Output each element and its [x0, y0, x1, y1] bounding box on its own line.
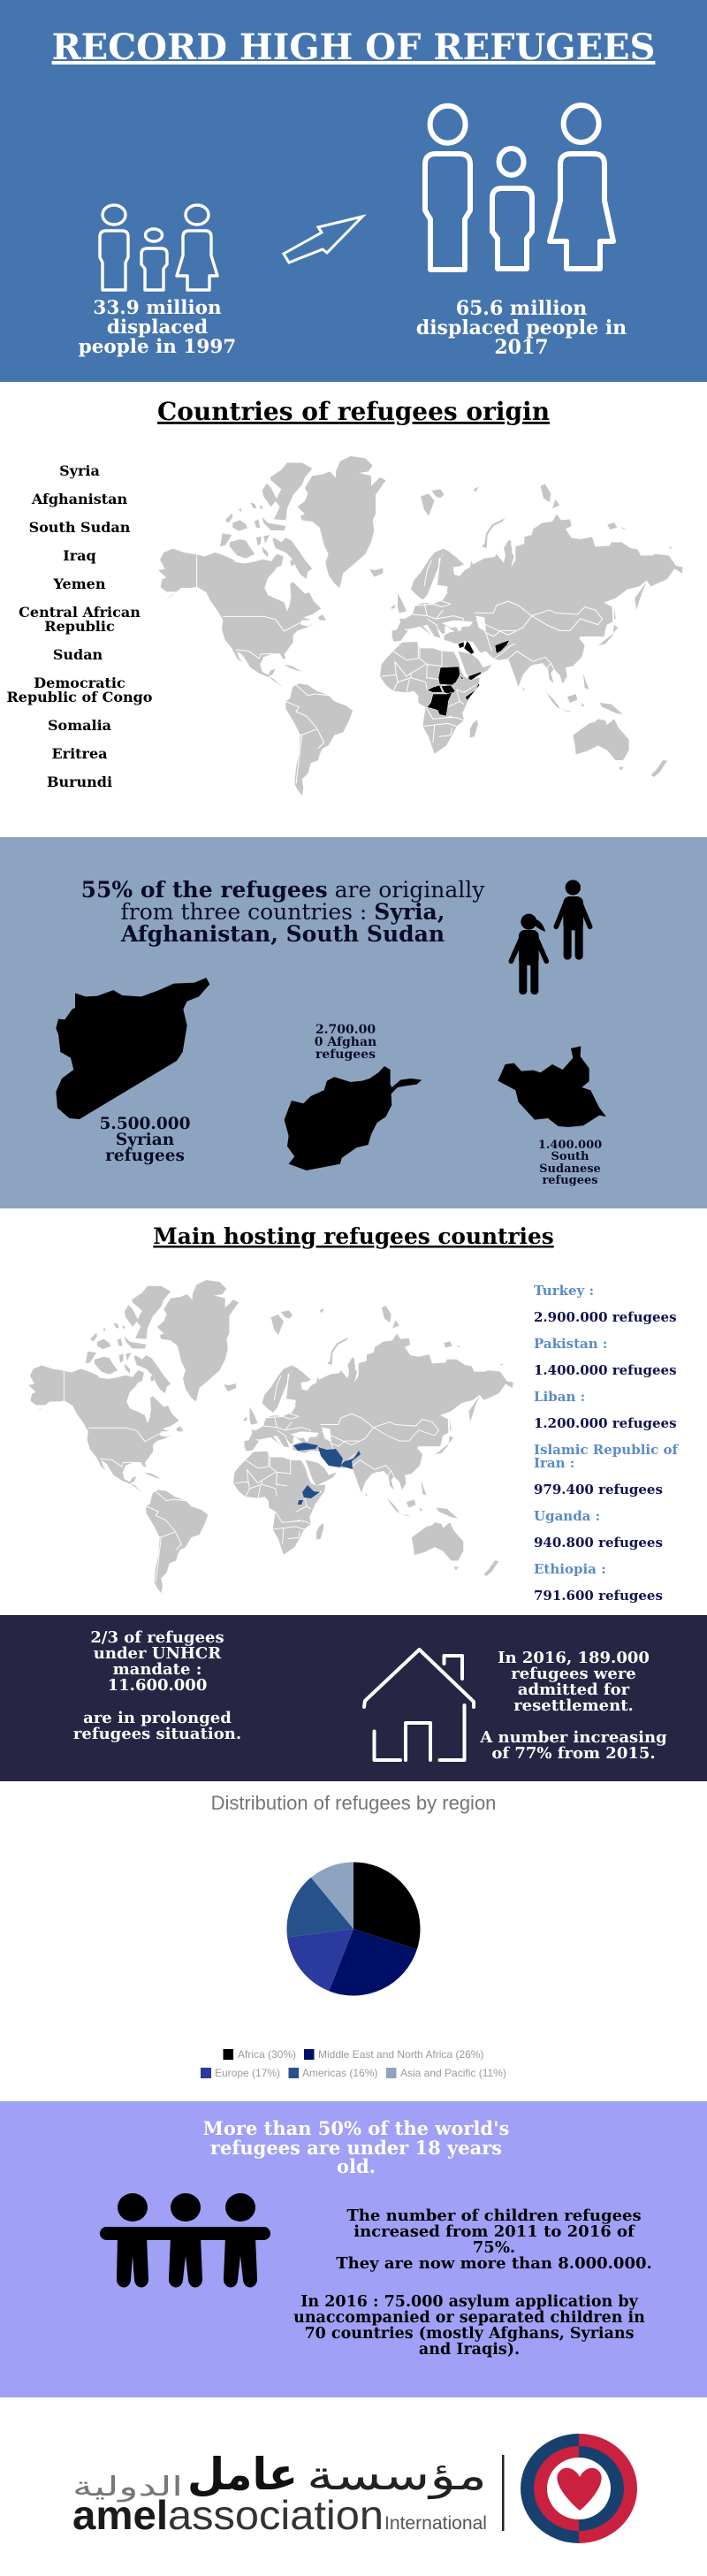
- text: UNHCR mandate: 11.600.000: [108, 1676, 207, 1695]
- icon: adult and child silhouettes: [511, 880, 590, 995]
- text: Afghan refugees: refugees: [315, 1048, 376, 1062]
- text: 55 percent statement: 55% of the refugees are originally: [81, 877, 485, 903]
- icon: small family 1997: [100, 205, 217, 290]
- panel: UNHCR and resettlement: [0, 1615, 707, 1781]
- title: RECORD HIGH OF REFUGEES: [52, 27, 655, 68]
- chart legend: Africa (30%): [238, 2048, 296, 2061]
- text: South Sudanese refugees: South: [551, 1150, 589, 1163]
- text: Syrian refugees: [99, 1115, 191, 1165]
- logo emblem: [521, 2434, 637, 2543]
- text: resettlement: refugees were: [511, 1665, 636, 1683]
- text: 1997 figure: displaced: [107, 316, 208, 339]
- heading: hosting countries: Main hosting refugees countries: [153, 1223, 554, 1249]
- panel: main hosting countries: [0, 1208, 707, 1615]
- heading: under 18: More than 50% of the world's: [203, 2117, 509, 2139]
- map: origin world map: [158, 456, 683, 796]
- text: Afghan refugees: 2.700.00: [315, 1023, 376, 1037]
- text: Afghan refugees: [315, 1023, 376, 1062]
- heading: under 18: [203, 2117, 509, 2177]
- panel: children refugees: [0, 2101, 707, 2397]
- text: resettlement: In 2016, 189.000: [498, 1649, 650, 1667]
- list: hosting countries figures: Uganda :: [534, 1508, 600, 1524]
- map: hosting world map: [28, 1280, 513, 1593]
- list: origin countries: Iraq: [63, 547, 96, 564]
- list: hosting countries figures: 979.400 refugees: [534, 1482, 663, 1498]
- chart legend: [201, 2048, 506, 2079]
- list: hosting countries figures: 791.600 refugees: [534, 1588, 663, 1604]
- list: hosting countries figures: Turkey :: [534, 1283, 594, 1299]
- text: South Sudanese refugees: Sudanese: [539, 1162, 601, 1176]
- list: origin countries: South Sudan: [29, 519, 131, 536]
- list: origin countries: Afghanistan: [31, 491, 128, 507]
- list: origin countries: Eritrea: [51, 745, 108, 762]
- logo: Amel Association International: [72, 2434, 637, 2543]
- text: 2017 figure: [416, 297, 627, 359]
- logo wordmark: association: [168, 2492, 384, 2538]
- list: hosting countries figures: 1.400.000 refugees: [534, 1362, 677, 1378]
- heading: origin countries: Countries of refugees origin: [157, 397, 550, 426]
- list: hosting countries figures: 2.900.000 refugees: [534, 1309, 677, 1325]
- text: 1997 figure: people in 1997: [79, 336, 236, 358]
- text: Syrian refugees: refugees: [105, 1147, 185, 1165]
- heading: under 18: refugees are under 18 years: [210, 2137, 502, 2159]
- logo wordmark: amel: [72, 2492, 168, 2538]
- list: hosting countries figures: [534, 1283, 679, 1604]
- list: hosting countries figures: Liban :: [534, 1389, 585, 1405]
- text: UNHCR mandate: under UNHCR: [94, 1644, 222, 1663]
- icon: house outline: [364, 1650, 474, 1760]
- text: 1997 figure: [79, 297, 236, 358]
- logo wordmark: International: [384, 2513, 487, 2534]
- panel: distribution pie chart: [0, 1781, 707, 2101]
- text: resettlement: of 77% from 2015.: [491, 1744, 656, 1763]
- text: resettlement: [479, 1649, 667, 1763]
- chart title: Distribution of refugees by region: [211, 1792, 496, 1814]
- list: origin countries: Democratic: [34, 674, 125, 691]
- text: UNHCR mandate: mandate :: [113, 1660, 201, 1679]
- text: resettlement: resettlement.: [513, 1696, 634, 1715]
- text: asylum applications: unaccompanied or separated children in: [293, 2309, 645, 2327]
- list: hosting countries figures: Islamic Republic of: [534, 1442, 679, 1458]
- text: number of children: increased from 2011 to 2016 of: [354, 2222, 635, 2241]
- text: asylum applications: [293, 2293, 645, 2359]
- text: South Sudanese refugees: [538, 1139, 602, 1187]
- list: hosting countries figures: Pakistan :: [534, 1336, 607, 1352]
- text: 55 percent statement: [81, 877, 485, 947]
- logo wordmark: مؤسسة: [307, 2451, 487, 2500]
- text: Afghan refugees: 0 Afghan: [315, 1035, 376, 1049]
- icon: large family 2017: [425, 105, 613, 270]
- logo wordmark: عامل: [187, 2449, 298, 2500]
- list: origin countries: Burundi: [47, 774, 112, 790]
- text: resettlement: admitted for: [518, 1680, 630, 1699]
- list: origin countries: Somalia: [48, 717, 111, 734]
- text: Syrian refugees: Syrian: [116, 1131, 175, 1149]
- text: asylum applications: and Iraqis).: [419, 2341, 520, 2359]
- text: UNHCR mandate: 2/3 of refugees: [90, 1628, 224, 1647]
- chart legend: Middle East and North Africa (26%): [318, 2048, 483, 2061]
- logo wordmark: الدولية: [72, 2472, 183, 2503]
- list: origin countries: [7, 462, 153, 790]
- text: asylum applications: 70 countries (mostly Afghans, Syrians: [304, 2325, 635, 2343]
- text: Syrian refugees: 5.500.000: [99, 1115, 191, 1133]
- text: UNHCR mandate: [73, 1628, 241, 1743]
- text: 2017 figure: displaced people in: [416, 316, 627, 339]
- text: 55 percent statement: Afghanistan, South Sudan: [120, 921, 445, 947]
- icon: three children holding arms: [100, 2193, 270, 2288]
- text: number of children: The number of children refugees: [346, 2206, 642, 2225]
- arrow: increase: [284, 217, 362, 263]
- list: origin countries: Syria: [59, 462, 100, 479]
- chart legend: Europe (17%): [215, 2067, 280, 2079]
- list: origin countries: Republic of Congo: [7, 689, 153, 705]
- text: 1997 figure: 33.9 million: [93, 297, 222, 319]
- text: number of children: 75%.: [473, 2238, 515, 2257]
- list: hosting countries figures: Iran :: [534, 1455, 574, 1471]
- list: hosting countries figures: 940.800 refugees: [534, 1535, 663, 1551]
- text: asylum applications: In 2016 : 75.000 asylum application by: [300, 2293, 639, 2311]
- chart legend: Americas (16%): [302, 2067, 377, 2079]
- chart legend: Asia and Pacific (11%): [400, 2067, 506, 2079]
- text: 55 percent statement: from three countries : Syria,: [121, 899, 445, 925]
- text: South Sudanese refugees: 1.400.000: [538, 1139, 602, 1152]
- list: hosting countries figures: Ethiopia :: [534, 1561, 606, 1577]
- text: South Sudanese refugees: refugees: [542, 1174, 598, 1187]
- text: number of children: They are now more than 8.000.000.: [336, 2254, 652, 2273]
- text: UNHCR mandate: refugees situation.: [73, 1725, 241, 1743]
- list: hosting countries figures: 1.200.000 refugees: [534, 1415, 677, 1431]
- text: number of children: [336, 2206, 652, 2273]
- map shape: Syria: [56, 978, 209, 1119]
- text: resettlement: A number increasing: [479, 1728, 667, 1747]
- panel: header record high: [0, 0, 707, 382]
- map shape: South Sudan: [498, 1046, 606, 1127]
- panel: countries of refugees origin: [0, 382, 707, 837]
- heading: under 18: old.: [337, 2155, 376, 2177]
- text: UNHCR mandate: are in prolonged: [83, 1709, 232, 1727]
- pie chart: [286, 1862, 420, 1995]
- text: 2017 figure: 65.6 million: [456, 297, 587, 320]
- text: 2017 figure: 2017: [494, 336, 549, 359]
- map shape: Afghanistan: [285, 1066, 422, 1170]
- list: origin countries: Sudan: [53, 646, 103, 663]
- list: origin countries: Central African: [19, 604, 141, 621]
- list: origin countries: Yemen: [53, 575, 106, 592]
- list: origin countries: Republic: [44, 618, 115, 635]
- panel: three countries of origin: [0, 837, 707, 1208]
- logo wordmark: [72, 2449, 504, 2538]
